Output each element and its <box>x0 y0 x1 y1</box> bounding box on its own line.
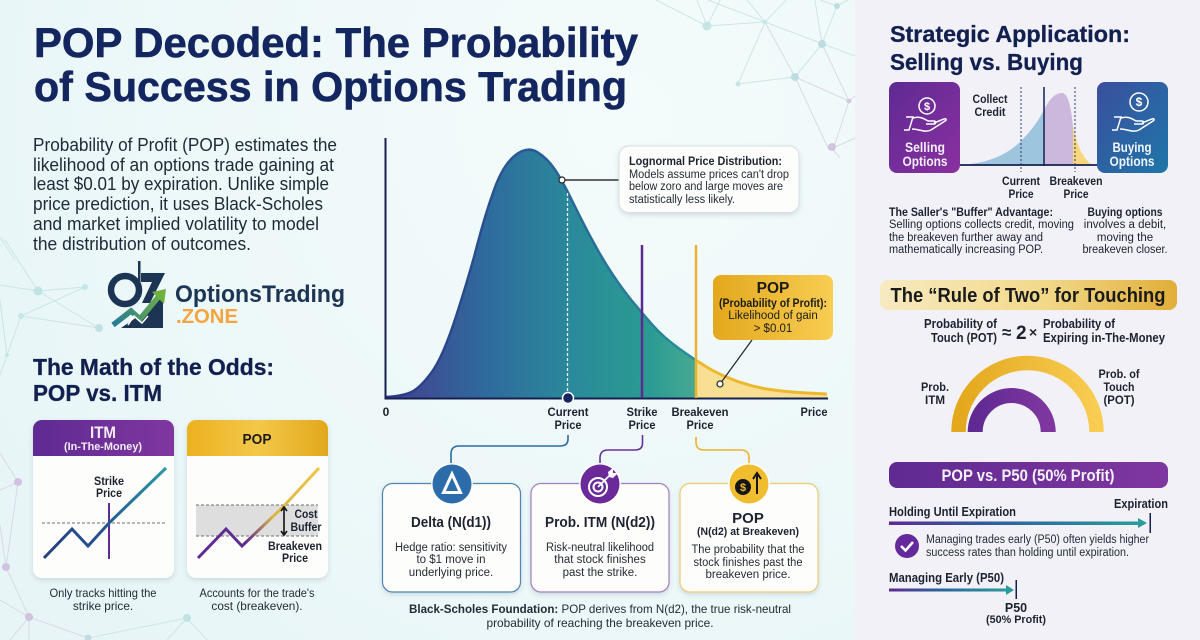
strike line <box>641 245 643 398</box>
caption: POP <box>200 586 315 613</box>
card: POP breakeven: breakeven price. <box>705 569 791 581</box>
icon: hand with dollar: $ <box>1136 95 1143 109</box>
decorative network mesh <box>0 0 855 640</box>
panel: right column <box>880 21 1177 626</box>
axis labels: Breakeven <box>672 405 728 419</box>
chart: selling vs buying mini distribution: Breakeven <box>1050 174 1102 188</box>
axis labels: Price <box>686 418 714 432</box>
caption: POP: Accounts for the trade's <box>200 586 315 600</box>
card: prob ITM <box>531 463 669 592</box>
panel: POP card: Breakeven <box>268 539 322 553</box>
card: delta <box>382 463 520 592</box>
timeline: holding until expiration: Expiration <box>1114 497 1168 511</box>
text: seller's buffer <box>889 207 1074 256</box>
callout: lognormal: Lognormal Price Distribution: <box>629 156 782 168</box>
icon: delta <box>431 463 473 505</box>
timeline: holding until expiration: Holding Until Expiration <box>889 505 1016 519</box>
card: POP breakeven: (N(d2) at Breakeven) <box>697 526 799 538</box>
chart axes <box>386 138 828 398</box>
formula: ≈ <box>1002 323 1011 342</box>
card: delta: Hedge ratio: sensitivity <box>395 542 507 554</box>
callout: POP: (Probability of Profit): <box>719 298 827 310</box>
box: buying options <box>1097 82 1168 173</box>
note: managing early <box>895 534 1149 559</box>
note: managing early: Managing trades early (P50) often yields higher <box>926 534 1149 546</box>
panel: POP card: POP <box>242 431 272 448</box>
card: prob ITM: that stock finishes <box>554 554 646 566</box>
title: of Success in Options Trading <box>34 63 627 110</box>
heading: math of the odds <box>33 354 274 406</box>
text: seller's buffer: The Saller's "Buffer" Advantage: <box>889 207 1053 219</box>
formula: Touch (POT) <box>931 331 997 345</box>
intro text: and market implied volatility to model <box>33 214 319 234</box>
heading: strategic application: Selling vs. Buying <box>890 49 1083 75</box>
panel: left column <box>33 19 639 613</box>
card: prob ITM: past the strike. <box>563 567 637 579</box>
chart: touch arcs: Prob. <box>921 380 949 394</box>
timeline: holding until expiration <box>889 497 1168 533</box>
chart: selling vs buying mini distribution <box>960 87 1102 201</box>
panel: ITM card: (In-The-Money) <box>64 441 142 453</box>
caption: POP: cost (breakeven). <box>211 599 303 613</box>
callout: lognormal: Models assume prices can't drop <box>629 169 789 181</box>
panel: ITM card: ITM <box>90 424 116 442</box>
intro text: least $0.01 by expiration. Unlike simple <box>33 174 329 194</box>
card: prob ITM: Prob. ITM (N(d2)) <box>545 514 655 531</box>
connectors <box>451 435 749 465</box>
box: selling options <box>889 82 960 173</box>
chart: touch arcs: (POT) <box>1104 393 1134 407</box>
chart: selling vs buying mini distribution: Price <box>1008 187 1034 201</box>
heading: math of the odds: POP vs. ITM <box>33 380 162 406</box>
card: prob ITM: Risk-neutral likelihood <box>546 542 654 554</box>
formula: Probability of <box>1043 317 1116 331</box>
axis labels <box>383 405 828 432</box>
icon: dollar and arrow: $ <box>740 482 746 494</box>
caption: ITM <box>50 586 157 613</box>
callout: POP: POP <box>757 280 789 297</box>
banner: POP vs P50: POP vs. P50 (50% Profit) <box>942 467 1114 485</box>
text: buying options: involves a debit, <box>1084 219 1166 231</box>
timeline: managing early: P50 <box>1005 601 1027 615</box>
text: buying options: breakeven closer. <box>1082 244 1168 256</box>
text: seller's buffer: the breakeven further away and <box>889 232 1043 244</box>
note: managing early: success rates than holding until expiration. <box>926 547 1129 559</box>
chart: touch arcs: ITM <box>925 393 945 407</box>
card: delta: to $1 move in <box>416 554 486 566</box>
chart: touch arcs <box>921 363 1140 432</box>
callout: lognormal: statistically less likely. <box>629 194 735 206</box>
callout: lognormal <box>559 146 799 212</box>
card: POP breakeven: stock finishes past the <box>694 557 802 569</box>
intro text: Probability of Profit (POP) estimates the <box>33 135 337 155</box>
area: distribution fill <box>386 150 827 398</box>
axis labels: Strike <box>626 405 658 419</box>
panel: POP card <box>187 420 328 578</box>
title <box>34 19 639 110</box>
axis labels: Current <box>548 405 588 419</box>
box: selling options: Selling <box>905 139 945 155</box>
chart: selling vs buying mini distribution: Price <box>1064 187 1089 201</box>
chart: selling vs buying mini distribution: Credit <box>974 105 1006 119</box>
chart: selling vs buying mini distribution: Collect <box>972 92 1008 106</box>
panel: ITM card: Strike <box>94 474 124 488</box>
card: POP breakeven: The probability that the <box>692 544 804 556</box>
text: seller's buffer: mathematically increasing POP. <box>889 244 1043 256</box>
callout: POP <box>713 275 833 387</box>
text: seller's buffer: Selling options collects credit, moving <box>889 219 1074 231</box>
card: delta: Delta (N(d1)) <box>411 514 491 531</box>
timeline: managing early <box>889 571 1046 626</box>
panel: center distribution chart <box>382 138 833 630</box>
panel: ITM card: Price <box>96 486 122 500</box>
card: POP breakeven: POP <box>732 510 764 527</box>
logo: OptionsTrading.Zone: OptionsTrading <box>175 281 345 308</box>
chart: selling vs buying mini distribution: Current <box>1002 174 1040 188</box>
logo: OptionsTrading.Zone <box>111 261 345 328</box>
banner: POP vs P50 <box>889 462 1168 488</box>
axis labels: Price <box>628 418 656 432</box>
banner: rule of two: The “Rule of Two” for Touching <box>890 285 1166 307</box>
icon: hand with dollar: $ <box>924 101 930 113</box>
footnote: Black-Scholes: Black-Scholes Foundation: POP derives from N(d2), the true risk-neutral <box>409 602 791 616</box>
box: buying options: Buying <box>1112 139 1152 155</box>
caption: ITM: strike price. <box>73 599 133 613</box>
current price marker <box>562 193 574 404</box>
axis labels: Price <box>800 405 828 419</box>
right panel background <box>855 0 1200 640</box>
intro text: the distribution of outcomes. <box>33 234 251 254</box>
logo: OptionsTrading.Zone: .ZONE <box>176 306 238 328</box>
icon: target <box>579 463 621 505</box>
text: buying options: moving the <box>1097 232 1153 244</box>
chart: touch arcs: Prob. of <box>1098 367 1140 381</box>
text: buying options <box>1082 207 1168 256</box>
formula: Probability of <box>924 317 998 331</box>
panel: POP card: Price <box>282 551 308 565</box>
panel: POP card: Buffer <box>290 520 322 534</box>
formula: × <box>1029 324 1037 340</box>
callout: POP: Likelihood of gain <box>728 310 818 322</box>
title: POP Decoded: The Probability <box>34 19 639 66</box>
box: selling options: Options <box>902 153 948 169</box>
heading: strategic application <box>890 21 1130 75</box>
formula: Expiring in-The-Money <box>1043 331 1165 345</box>
heading: strategic application: Strategic Application: <box>890 21 1130 47</box>
banner: rule of two <box>880 280 1177 310</box>
card: delta: underlying price. <box>409 567 493 579</box>
panel: POP card: Cost <box>294 507 318 521</box>
caption: ITM: Only tracks hitting the <box>50 586 157 600</box>
intro text <box>33 135 337 254</box>
box: buying options: Options <box>1110 153 1155 169</box>
callout: POP: > $0.01 <box>754 323 792 335</box>
footnote: Black-Scholes: probability of reaching the breakeven price. <box>486 616 714 630</box>
axis labels: 0 <box>383 405 390 419</box>
callout: lognormal: below zoro and large moves are <box>629 181 783 193</box>
footnote: Black-Scholes <box>409 602 791 630</box>
formula: 2 <box>1016 323 1027 344</box>
axis labels: Price <box>554 418 582 432</box>
text: buying options: Buying options <box>1088 207 1162 219</box>
panel: ITM card <box>33 420 174 578</box>
card: POP breakeven <box>680 463 818 592</box>
intro text: price prediction, it uses Black-Scholes <box>33 194 323 214</box>
formula <box>924 317 1165 345</box>
timeline: managing early: (50% Profit) <box>986 614 1046 626</box>
breakeven line <box>695 245 697 398</box>
intro text: likelihood of an options trade gaining at <box>33 155 334 175</box>
chart: touch arcs: Touch <box>1104 380 1134 394</box>
timeline: managing early: Managing Early (P50) <box>889 571 1004 585</box>
heading: math of the odds: The Math of the Odds: <box>33 354 274 380</box>
